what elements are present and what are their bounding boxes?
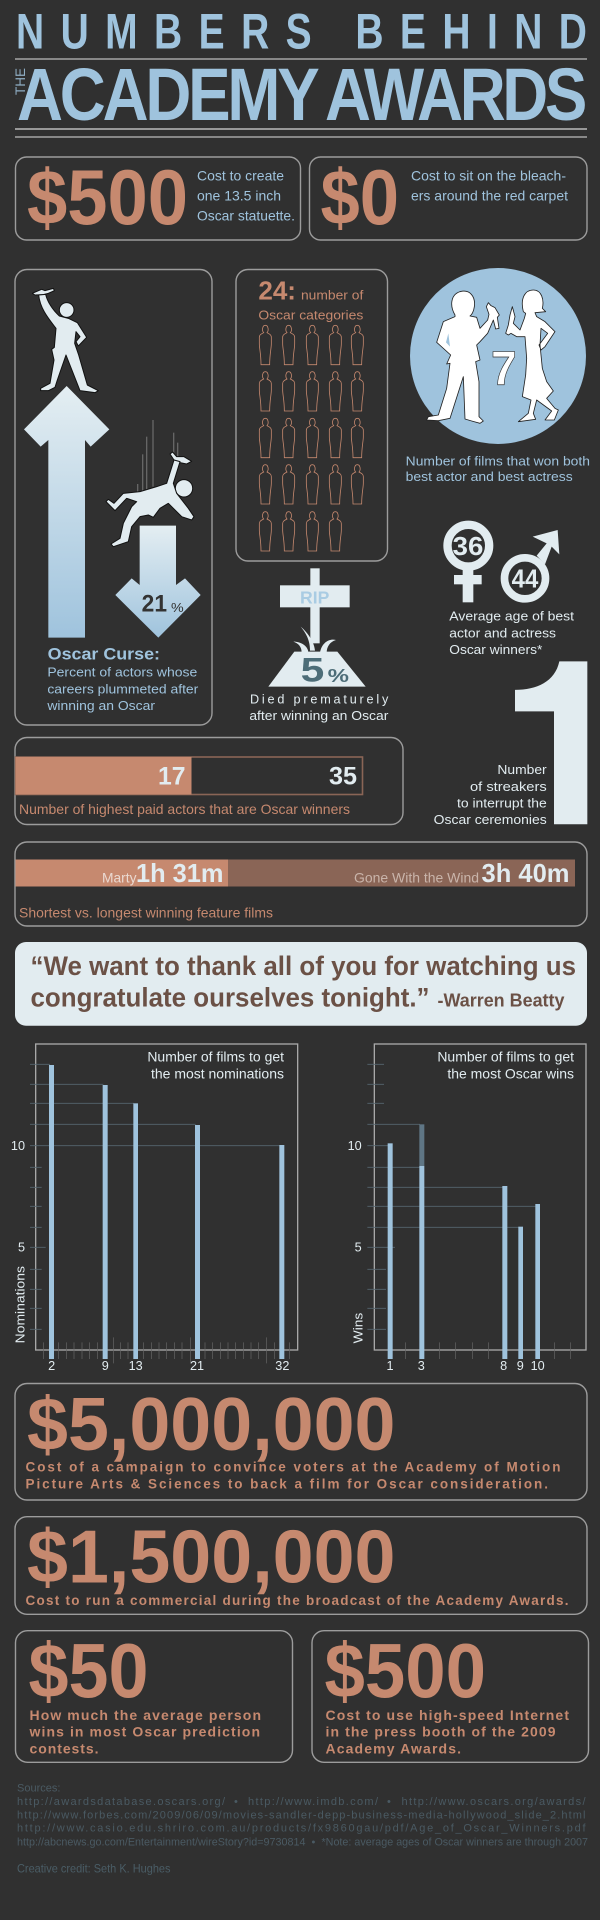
bar chart: 17 of 35: 35 xyxy=(329,762,357,790)
y axis labels xyxy=(11,1139,27,1343)
number 7: 7 xyxy=(491,342,517,396)
caption: actor and actress xyxy=(449,625,557,640)
arrow: down with 21% xyxy=(115,526,201,638)
caption: best actor and best actress xyxy=(406,469,573,484)
x axis labels: 32 xyxy=(275,1359,289,1373)
sources: Sources: xyxy=(17,1783,60,1795)
bars xyxy=(388,1124,540,1359)
panel: $0 bleachers cost: $0 xyxy=(320,153,399,241)
quote xyxy=(15,942,587,1026)
caption: Oscar winners* xyxy=(449,642,542,657)
caption: Oscar ceremonies xyxy=(434,812,547,827)
chart: films with most wins xyxy=(348,1044,586,1373)
sources: http://abcnews.go.com/Entertainment/wireStory?id=9730814 xyxy=(17,1837,306,1849)
x axis labels: 10 xyxy=(531,1359,545,1373)
text: Oscar Curse caption: Oscar Curse: xyxy=(48,644,160,663)
chart: films with most nominations xyxy=(11,1044,298,1373)
sources: http://www.casio.edu.shriro.com.au/products/fx9860gau/pdf/Age_of_Oscar_Winners.pdf xyxy=(17,1823,586,1835)
bar chart: 17 of 35: 17 xyxy=(158,762,186,790)
text: Oscar Curse caption: careers plummeted after xyxy=(47,681,199,696)
panel: $50 prediction contests: How much the average person xyxy=(30,1707,261,1723)
bar chart: film lengths: 3h 40m xyxy=(482,858,570,888)
panel: average ages xyxy=(447,525,574,657)
title: NUMBERS BEHIND xyxy=(16,3,587,60)
icon: female symbol 36: 36 xyxy=(453,531,483,561)
sources xyxy=(17,1783,588,1849)
title: THE xyxy=(12,68,28,95)
arrow: up xyxy=(24,386,109,638)
y axis labels: 10 xyxy=(11,1139,25,1153)
quote: congratulate ourselves tonight.” xyxy=(30,983,430,1013)
heading: 24 number of Oscar categories: Oscar categories xyxy=(258,307,364,322)
panel: $0 bleachers cost: ers around the red carpet xyxy=(411,188,568,204)
bars xyxy=(49,1065,284,1359)
sources: http://awardsdatabase.oscars.org/ xyxy=(17,1796,226,1808)
chart title xyxy=(437,1050,574,1081)
sources: http://www.forbes.com/2009/06/09/movies-sandler-depp-business-media-hollywood_slide_2.html xyxy=(17,1809,586,1821)
y axis labels: 5 xyxy=(18,1241,25,1255)
panel: $50 prediction contests xyxy=(16,1628,292,1762)
bar chart: film lengths: 1h 31m xyxy=(136,858,224,888)
icon: grave marker: RIP xyxy=(300,587,329,607)
caption: of streakers xyxy=(470,779,547,794)
panel: $1,500,000 commercial: $1,500,000 xyxy=(27,1515,396,1599)
panel: shortest vs longest films: Shortest vs. longest winning feature films xyxy=(19,904,273,920)
icon: man holding Oscar xyxy=(32,288,98,393)
x axis labels: 3 xyxy=(418,1359,425,1373)
panel: $50 prediction contests: $50 xyxy=(28,1628,148,1714)
sources: • xyxy=(234,1796,238,1808)
panel: RIP 5% died prematurely xyxy=(249,568,389,723)
panel: $500 internet: in the press booth of the 2009 xyxy=(326,1724,556,1740)
panel: $500 internet: $500 xyxy=(324,1628,486,1714)
icon: falling man xyxy=(106,452,194,547)
text: died prematurely caption: Died prematurely xyxy=(250,692,389,706)
x axis labels: 9 xyxy=(102,1359,109,1373)
icon: male symbol 44: 44 xyxy=(512,563,539,593)
panel: 7 films won both best actor and actress xyxy=(406,268,590,484)
sources: • xyxy=(387,1796,391,1808)
chart title: Number of films to get xyxy=(147,1050,284,1065)
panel: $500 statuette cost xyxy=(16,153,300,241)
chart title: the most Oscar wins xyxy=(447,1066,574,1081)
heading: 24 number of Oscar categories: number of xyxy=(301,287,364,302)
text: Oscar Curse caption: Percent of actors whose xyxy=(47,665,197,680)
panel: $5,000,000 campaign: Picture Arts & Sciences to back a film for Oscar consideration. xyxy=(26,1477,548,1492)
panel: highest paid actors bar xyxy=(15,738,403,824)
creative credit: Creative credit: Seth K. Hughes xyxy=(17,1861,170,1875)
icon: grave marker: 5 xyxy=(301,652,324,690)
arrow: down with 21%: % xyxy=(171,600,184,615)
x axis labels xyxy=(386,1359,545,1373)
panel: $5,000,000 campaign: Cost of a campaign to convince voters at the Academy of Motion xyxy=(26,1460,560,1475)
heading: 24 number of Oscar categories xyxy=(258,275,364,322)
arrow: down with 21%: 21 xyxy=(142,591,167,618)
x axis labels: 13 xyxy=(129,1359,143,1373)
y axis labels xyxy=(348,1139,366,1343)
panel: $500 internet xyxy=(312,1628,588,1762)
x axis labels: 2 xyxy=(48,1359,55,1373)
caption: Average age of best xyxy=(449,609,574,624)
caption xyxy=(449,609,574,657)
x axis labels: 9 xyxy=(517,1359,524,1373)
panel: $500 statuette cost: $500 xyxy=(27,153,188,241)
title xyxy=(12,3,587,138)
text: Oscar Curse caption xyxy=(46,644,199,713)
panel: $50 prediction contests: contests. xyxy=(30,1740,98,1756)
bar chart: film lengths: Marty xyxy=(102,870,136,886)
sources: *Note: average ages of Oscar winners are through 2007 xyxy=(322,1837,588,1849)
icon: grave marker: % xyxy=(328,665,350,686)
y axis labels: Nominations xyxy=(13,1266,27,1343)
panel: $500 statuette cost: Cost to create xyxy=(197,168,284,184)
panel: 24 Oscar categories xyxy=(236,270,388,561)
speed lines xyxy=(137,420,178,494)
panel: $500 statuette cost: Oscar statuette. xyxy=(197,208,295,224)
panel: highest paid actors bar: Number of highest paid actors that are Oscar winners xyxy=(19,801,350,817)
y axis labels: 10 xyxy=(348,1139,362,1153)
caption xyxy=(406,453,590,484)
panel: Oscar curse xyxy=(15,270,212,725)
y axis labels: Wins xyxy=(352,1313,366,1343)
bar chart: film lengths xyxy=(16,858,575,888)
chart title: Number of films to get xyxy=(437,1050,574,1065)
caption: to interrupt the xyxy=(457,796,547,810)
panel: $500 internet: Academy Awards. xyxy=(326,1740,461,1756)
panel: $5,000,000 campaign xyxy=(15,1382,587,1500)
panel: $5,000,000 campaign: $5,000,000 xyxy=(27,1382,396,1466)
panel: $0 bleachers cost xyxy=(310,153,587,241)
panel: $50 prediction contests: wins in most Oscar prediction xyxy=(28,1724,260,1740)
panel: $0 bleachers cost: Cost to sit on the bleach- xyxy=(411,168,566,184)
title: AWARDS xyxy=(325,54,587,136)
icon: actress with Oscar xyxy=(506,290,558,422)
title: ACADEMY xyxy=(17,54,320,136)
heading: 24 number of Oscar categories: 24: xyxy=(258,275,296,305)
x axis labels: 21 xyxy=(190,1359,204,1373)
text: died prematurely caption: after winning an Oscar xyxy=(249,709,388,723)
text: died prematurely caption xyxy=(249,692,389,723)
quote: -Warren Beatty xyxy=(438,991,564,1011)
x axis labels xyxy=(48,1359,289,1373)
caption xyxy=(434,762,547,827)
panel: $1,500,000 commercial: Cost to run a commercial during the broadcast of the Academy Awards. xyxy=(26,1593,569,1608)
panel: $1,500,000 commercial xyxy=(15,1515,587,1614)
quote: “We want to thank all of you for watching us xyxy=(30,951,576,981)
sources: http://www.oscars.org/awards/ xyxy=(402,1796,586,1808)
icon: actor with Oscar xyxy=(427,291,499,423)
caption: Number of films that won both xyxy=(406,453,590,468)
sources: http://www.imdb.com/ xyxy=(248,1796,379,1808)
panel: $500 internet: Cost to use high-speed Internet xyxy=(326,1707,569,1723)
text: Oscar Curse caption: winning an Oscar xyxy=(46,698,156,713)
caption: Number xyxy=(497,762,547,777)
y axis labels: 5 xyxy=(355,1241,362,1255)
chart title xyxy=(147,1050,284,1081)
bar chart: 17 of 35 xyxy=(16,757,362,794)
panel: shortest vs longest films xyxy=(15,842,587,926)
big number 1 xyxy=(515,661,587,824)
icon: grave marker xyxy=(268,568,366,690)
x axis labels: 1 xyxy=(386,1359,394,1373)
chart title: the most nominations xyxy=(151,1066,284,1081)
x axis labels: 8 xyxy=(500,1359,507,1373)
panel: 1 streaker xyxy=(434,661,587,827)
icon grid: 24 figures xyxy=(259,325,363,551)
sources: • xyxy=(312,1837,316,1849)
panel: $500 statuette cost: one 13.5 inch xyxy=(197,188,281,204)
bar chart: film lengths: Gone With the Wind xyxy=(354,870,479,886)
